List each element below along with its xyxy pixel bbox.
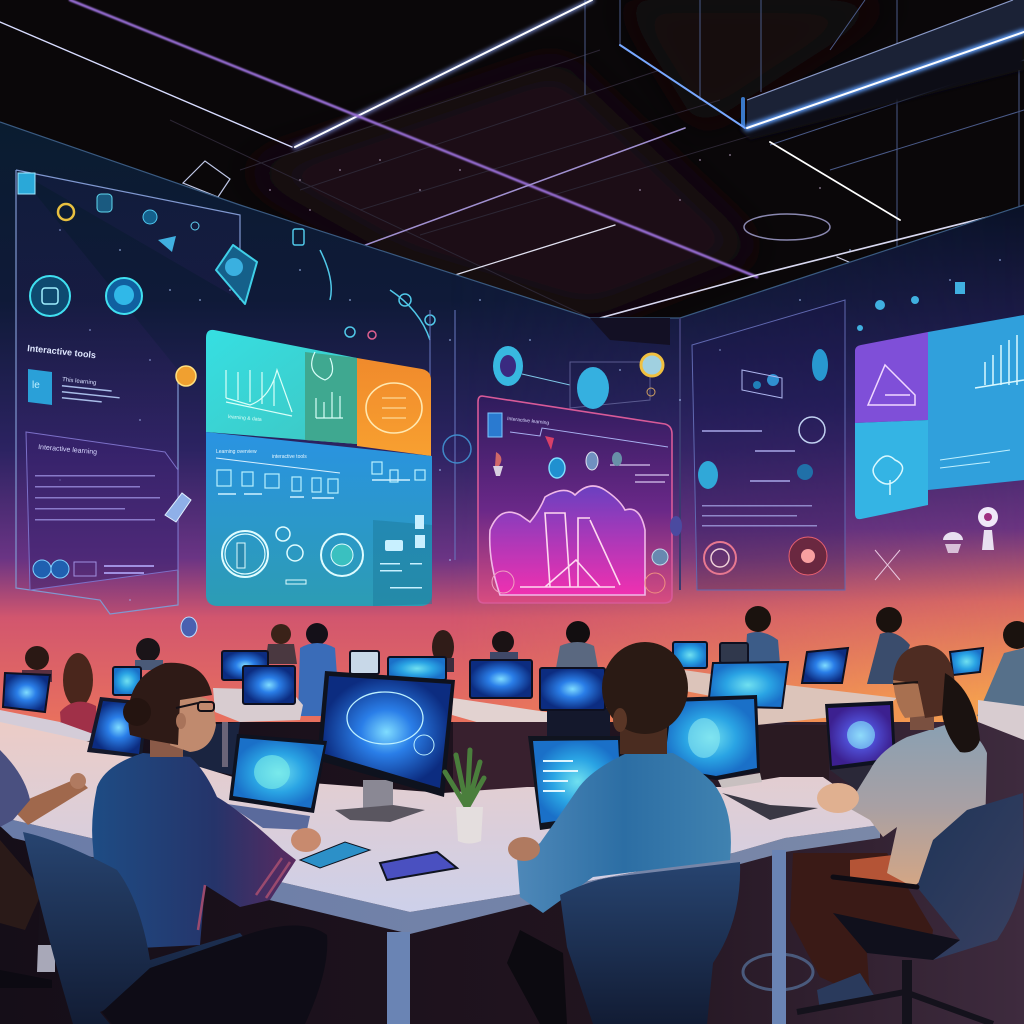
- small icons: [493, 436, 622, 478]
- torso: [847, 725, 987, 887]
- text block: [62, 377, 120, 403]
- purple card: [855, 332, 928, 423]
- back wall: [0, 122, 1024, 730]
- panel: right middle wall: [692, 300, 845, 590]
- laptop: right: [825, 701, 896, 793]
- torso: [92, 753, 296, 950]
- cyan card: [855, 420, 928, 519]
- glasses: [893, 682, 918, 684]
- laptop: front centre: [528, 736, 625, 830]
- ceiling beam: [738, 0, 1024, 140]
- small wall icons: [293, 229, 471, 600]
- icon: small side badge: [670, 516, 682, 536]
- icon: gold coin: [176, 366, 196, 386]
- foot ring: [743, 954, 813, 990]
- chair: foreground right: [797, 793, 1024, 1024]
- person: foreground right: [743, 645, 987, 1010]
- desk leg: [387, 932, 410, 1024]
- text block: This learning: [62, 377, 97, 387]
- text lines: Interactive learning: [507, 416, 550, 426]
- panel: teal and blue dashboard: [206, 330, 432, 606]
- icon: blue tablet: [488, 413, 502, 437]
- person: foreground centre: [507, 642, 731, 1024]
- panel: right wall cards: [855, 282, 1024, 580]
- icon: upper centre orbs: [493, 346, 663, 409]
- glasses: [176, 703, 198, 708]
- chair: foreground centre: [560, 862, 740, 1024]
- neck and head: [150, 733, 183, 757]
- star specks: [59, 229, 1001, 601]
- tablet on desk: [300, 842, 370, 868]
- icon: large shield badge: [216, 245, 257, 304]
- teal chart card: [206, 330, 357, 444]
- shoe: [817, 973, 877, 1010]
- large monitor: [317, 671, 455, 822]
- wall text lines: [702, 430, 817, 526]
- chair: foreground left: [23, 832, 250, 1024]
- ponytail: [942, 673, 980, 752]
- person: foreground left: [92, 663, 321, 950]
- room floor: [0, 722, 1024, 1024]
- icon: floating tag: [165, 493, 191, 522]
- teal chart card: learning & data: [228, 414, 262, 423]
- icon: keyhole badge: [978, 507, 998, 550]
- person: [135, 638, 163, 670]
- person: [556, 621, 598, 668]
- person: [490, 631, 518, 660]
- monitor: right of centre: [660, 695, 762, 788]
- ceiling light strips: [0, 0, 1024, 318]
- inner text panel: [26, 432, 178, 590]
- person: [22, 646, 52, 682]
- lower right sketch: [875, 550, 900, 580]
- plant: [445, 750, 484, 844]
- desk leg right: [772, 850, 786, 1024]
- blue card: interactive tools: [272, 454, 307, 460]
- panel: left information wall: [16, 170, 240, 637]
- ceiling: [0, 0, 1024, 340]
- person: red top: [60, 653, 97, 738]
- chart: cloud shape: [490, 486, 668, 595]
- person: [745, 606, 780, 664]
- icon: split circle: [943, 532, 963, 553]
- person: far left: [0, 750, 88, 988]
- icon: circular badges: [30, 276, 142, 316]
- upper right icons: [857, 282, 965, 331]
- back laptops: [3, 642, 983, 712]
- person: [867, 607, 910, 684]
- orange card: [357, 358, 431, 456]
- person: [265, 624, 297, 664]
- head: [910, 705, 934, 730]
- inner text panel: Interactive learning: [38, 444, 97, 456]
- wall icons: [698, 349, 828, 575]
- blue chart card: [928, 315, 1024, 490]
- text lines: [507, 416, 669, 482]
- hands: [817, 783, 859, 813]
- icon: blue card: [28, 369, 52, 405]
- trousers: [790, 853, 933, 1000]
- heading: left panel title: Interactive tools: [27, 343, 96, 360]
- hand: [291, 828, 321, 852]
- trousers: foreground left: [102, 925, 327, 1024]
- rings: [222, 527, 363, 584]
- person: blue shirt: [298, 623, 340, 716]
- blue card: Learning overview: [216, 449, 257, 455]
- icon: blue card: le: [32, 380, 40, 391]
- laptop: front centre left: [227, 734, 327, 830]
- top icon row: [18, 173, 199, 252]
- panel: purple cloud dashboard: [478, 396, 672, 603]
- icon row: [217, 462, 425, 493]
- blue card: [206, 432, 432, 606]
- person: [432, 630, 454, 672]
- keyboard and papers: [722, 793, 818, 820]
- person: far right: [977, 621, 1024, 722]
- tablet: purple: [380, 852, 457, 880]
- back row people: [22, 606, 1024, 738]
- back desks: [0, 668, 1024, 794]
- laptop: front left: [87, 697, 148, 758]
- foreground desk: [0, 722, 880, 1024]
- icon: pink wall badge: [181, 617, 197, 637]
